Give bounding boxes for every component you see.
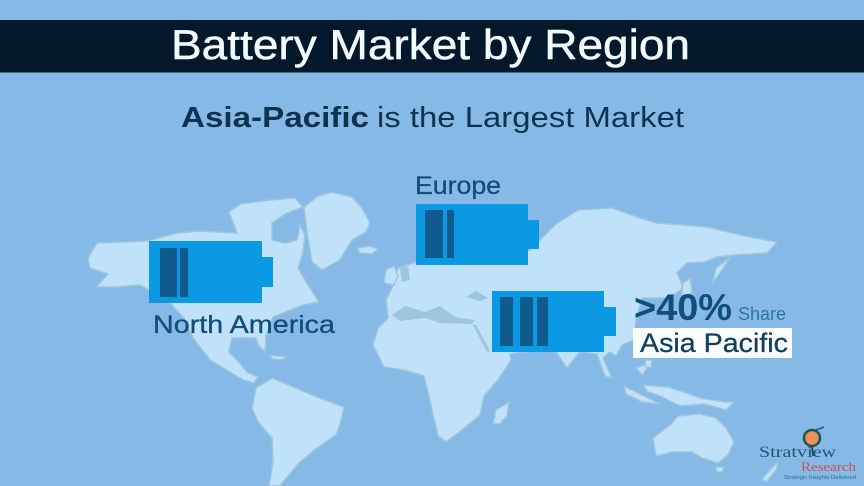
subtitle: is the Largest Market bbox=[377, 102, 684, 134]
New Zealand bbox=[762, 462, 778, 482]
Australia bbox=[653, 414, 734, 463]
label: Asia Pacific: Asia Pacific bbox=[640, 328, 788, 358]
battery: Europe bbox=[416, 204, 539, 265]
UK bbox=[384, 266, 398, 285]
label box bbox=[633, 328, 792, 358]
title bar bbox=[0, 20, 864, 72]
title: Battery Market by Region bbox=[171, 21, 690, 68]
logo wordmark: Stratview bbox=[759, 444, 837, 461]
label: Europe: Europe bbox=[415, 172, 501, 200]
share word: Share bbox=[738, 304, 786, 324]
Tasmania bbox=[716, 467, 724, 472]
North America bbox=[88, 198, 319, 383]
label: North America: North America bbox=[153, 311, 335, 339]
Iceland bbox=[357, 246, 378, 254]
icon: magnifier target bbox=[804, 427, 824, 456]
battery: North America bbox=[149, 241, 273, 303]
Madagascar bbox=[493, 402, 509, 424]
battery: Asia Pacific bbox=[492, 291, 616, 352]
Antilles bbox=[270, 355, 287, 360]
logo bbox=[759, 427, 857, 481]
subtitle bbox=[181, 102, 684, 134]
subtitle: Asia-Pacific bbox=[181, 102, 369, 134]
share callout bbox=[633, 287, 792, 358]
share value: >40% bbox=[634, 287, 732, 328]
logo tagline: Strategic Insights Delivered bbox=[784, 475, 856, 481]
Japan bbox=[682, 278, 692, 300]
world map bbox=[88, 192, 778, 486]
logo research: Research bbox=[801, 459, 857, 474]
Kamchatka bbox=[712, 258, 730, 284]
SE Asia islands bbox=[624, 386, 660, 404]
Greenland bbox=[304, 192, 370, 270]
South America bbox=[252, 378, 344, 486]
Mediterranean and inland seas bbox=[392, 266, 490, 352]
Eurasia and Africa bbox=[373, 208, 777, 442]
